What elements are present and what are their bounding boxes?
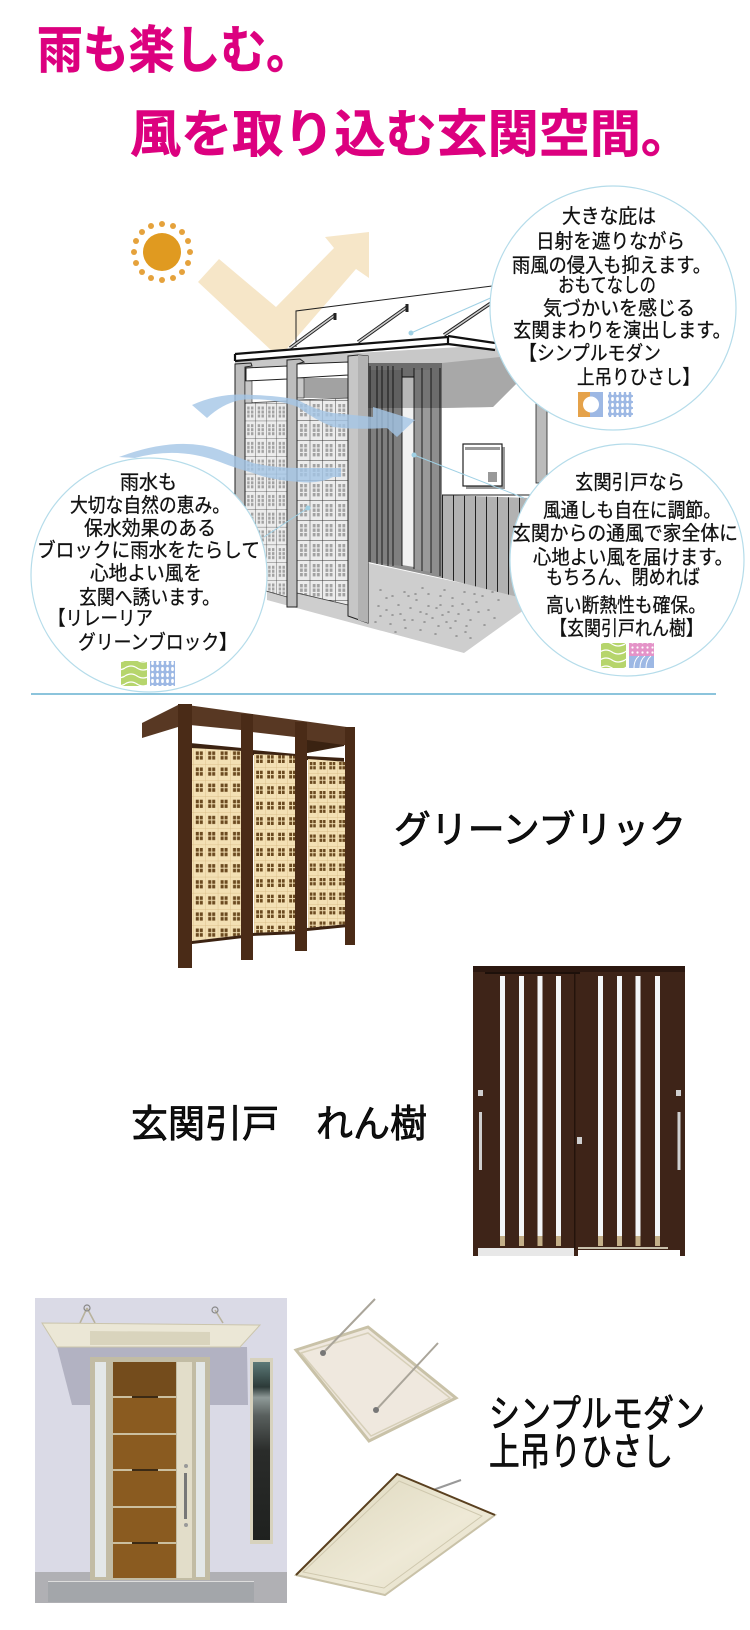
panel: sliding door callout: 心地よい風を届けます。 [533,546,733,569]
panel: sliding door callout: もちろん、閉めれば [546,566,700,589]
panel: canopy callout: 玄関まわりを演出します。 [513,319,731,342]
panel: sliding door callout: 【玄関引戸れん樹】 [550,617,703,640]
panel: canopy callout: 【シンプルモダン [519,342,661,365]
label: simple modern canopy: 上吊りひさし [489,1432,673,1474]
panel: green block callout: 【リレーリア [48,608,153,630]
arrow: wind flow upper [192,394,415,437]
house illustration [235,285,547,653]
panel: canopy callout: 気づかいを感じる [543,297,695,320]
glass canopy [296,285,500,347]
canopy [42,1323,260,1347]
handle [184,1473,187,1519]
panel: green block callout: 大切な自然の恵み。 [70,494,230,517]
right post [536,403,547,483]
arrow: sunlight reflected by the canopy [198,232,369,352]
icon: wind [601,643,626,668]
panel: sliding door callout: 風通しも自在に調節。 [543,499,721,522]
panel: green block callout: グリーンブロック】 [78,630,237,654]
posts [178,704,192,968]
ground [267,560,524,653]
suspension rods [290,301,494,348]
panel: green block callout [31,458,267,692]
panel: green block callout: 玄関へ誘います。 [79,586,220,609]
icon: ventilation [629,643,654,668]
icon: rain [150,661,175,686]
panel: sliding door callout: 玄関からの通風で家全体に [512,522,738,545]
panel: green block callout: 保水効果のある [84,517,216,540]
white beams [246,366,287,381]
beam shadow wall [304,378,350,398]
entrance door [368,363,442,578]
panel: canopy callout [490,186,736,430]
label: green brick: グリーンブリック [394,810,686,852]
side window [250,1358,273,1544]
panel: sliding door callout: 玄関引戸なら [575,471,685,494]
canopy slab [235,336,495,361]
icon: sun shade [578,392,603,417]
label: simple modern canopy: シンプルモダン [489,1394,705,1436]
panel: canopy callout: 上吊りひさし】 [577,366,700,389]
panel: canopy callout: おもてなしの [558,275,656,297]
photo: entrance with canopy [35,1298,287,1603]
panel: sliding door callout: 高い断熱性も確保。 [546,594,706,617]
panel: canopy callout: 雨風の侵入も抑えます。 [512,254,711,277]
icon: rain [608,392,633,417]
panel: green block callout: 心地よい風を [90,562,202,585]
title: 風を取り込む玄関空間。 [130,106,692,163]
pillars [235,363,252,577]
panel: canopy callout: 大きな庇は [562,205,656,228]
shadow [57,1347,248,1405]
panel: green block callout: 雨水も [120,471,177,494]
title: 雨も楽しむ。 [37,22,312,79]
hanging rods [80,1308,223,1323]
photo: canopy underside [296,1474,495,1595]
panel: sliding door callout [510,444,744,676]
door frame [90,1357,210,1580]
panel: green block callout: ブロックに雨水をたらして [37,538,260,562]
brick panels [192,748,243,941]
label: simple modern canopy [489,1394,705,1474]
product: green brick frame [142,704,355,968]
mailbox [463,444,505,489]
block panels [245,401,287,597]
wood door [113,1362,176,1578]
step [48,1581,254,1602]
title [37,22,692,163]
label: sliding door: 玄関引戸 れん樹 [131,1104,427,1146]
photo: canopy top view [296,1299,456,1441]
panel: canopy callout: 日射を遮りながら [536,230,685,253]
product: sliding door [473,966,685,1256]
icon: wind [121,661,147,686]
arrow: wind flow lower [119,444,341,482]
soffit [235,345,520,408]
icon: sun [131,221,193,283]
siding wall [442,495,530,600]
rails [190,743,242,753]
leader lines [264,296,524,537]
